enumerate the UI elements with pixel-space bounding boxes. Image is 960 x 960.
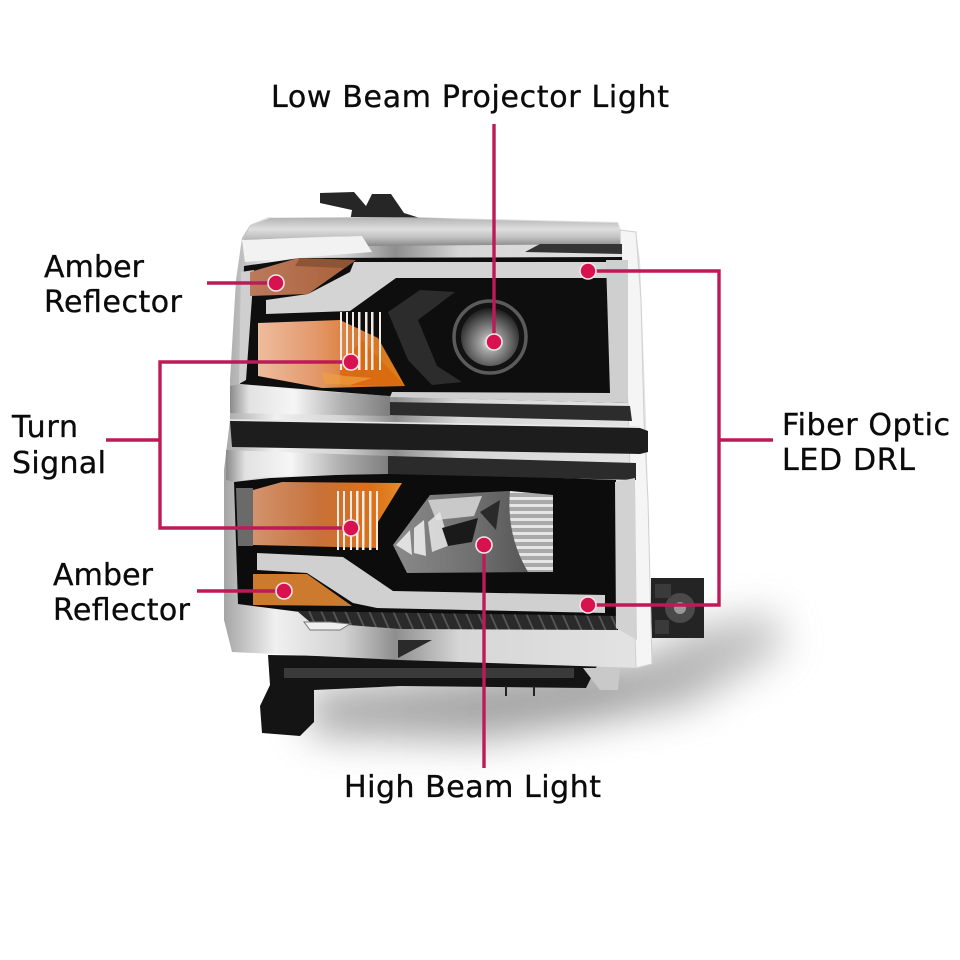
- chrome lower bumper highlight: [304, 622, 350, 630]
- callout: high beam light: [344, 537, 601, 805]
- chrome top trim: [244, 218, 622, 246]
- black vent top right: [525, 244, 622, 254]
- chrome band under upper lens: [230, 384, 390, 416]
- headlight assembly: [11, 80, 960, 805]
- high beam reflector: [393, 491, 553, 573]
- callout: lower amber reflector: [53, 558, 292, 628]
- lower marker: [343, 520, 359, 536]
- floor shadow: [310, 612, 785, 740]
- chrome top-left highlight: [242, 236, 372, 262]
- label: LED DRL: [782, 443, 915, 478]
- marker: [476, 537, 492, 553]
- leader line: [207, 281, 276, 285]
- upper turn signal amber: [258, 320, 405, 388]
- label: Reflector: [44, 285, 183, 320]
- mounting bracket top: [320, 192, 423, 222]
- upper fiber optic DRL band: [266, 262, 607, 314]
- marker: [268, 275, 284, 291]
- projector shroud: [388, 290, 462, 385]
- ribbed lower trim: [297, 611, 617, 630]
- glossy strip above center bar: [388, 402, 632, 421]
- leader line: [482, 545, 486, 768]
- lower turn signal amber: [253, 482, 402, 548]
- label: High Beam Light: [344, 770, 601, 805]
- lower stripes: [337, 491, 378, 550]
- lower inner frame: [615, 478, 637, 640]
- lower black supports: [260, 655, 620, 736]
- label: Low Beam Projector Light: [271, 80, 669, 115]
- bracket line: [106, 362, 351, 528]
- callout: low beam projector light: [271, 80, 669, 350]
- callout: upper amber reflector: [44, 250, 284, 320]
- upper marker: [343, 354, 359, 370]
- dark gap under chrome: [398, 640, 432, 658]
- chrome housing: [224, 217, 652, 668]
- upper stripes: [340, 312, 381, 370]
- label: Amber: [53, 558, 154, 593]
- lower amber reflector: [253, 574, 352, 606]
- upper inner frame: [390, 260, 628, 403]
- upper amber reflector: [250, 258, 356, 296]
- projector lens: [454, 301, 526, 373]
- marker: [486, 334, 502, 350]
- bracket line: [588, 271, 773, 605]
- label: Signal: [12, 446, 106, 481]
- callout: turn signal: [11, 354, 359, 536]
- upper marker: [580, 263, 596, 279]
- lower fiber optic DRL band: [257, 553, 605, 613]
- lower lens: [234, 456, 637, 640]
- label: Turn: [11, 410, 78, 445]
- lower marker: [580, 597, 596, 613]
- marker: [276, 583, 292, 599]
- chrome upper-lower band: [226, 450, 388, 482]
- upper lens: [239, 257, 628, 403]
- label: Reflector: [53, 593, 191, 628]
- callout: fiber optic LED DRL: [580, 263, 960, 613]
- label: Fiber Optic: [782, 408, 950, 443]
- leader line: [197, 589, 284, 593]
- mounting tab right: [651, 578, 704, 638]
- leader line: [492, 124, 496, 342]
- dark center bar: [230, 420, 648, 454]
- chrome right edge: [620, 230, 652, 668]
- label: Amber: [44, 250, 145, 285]
